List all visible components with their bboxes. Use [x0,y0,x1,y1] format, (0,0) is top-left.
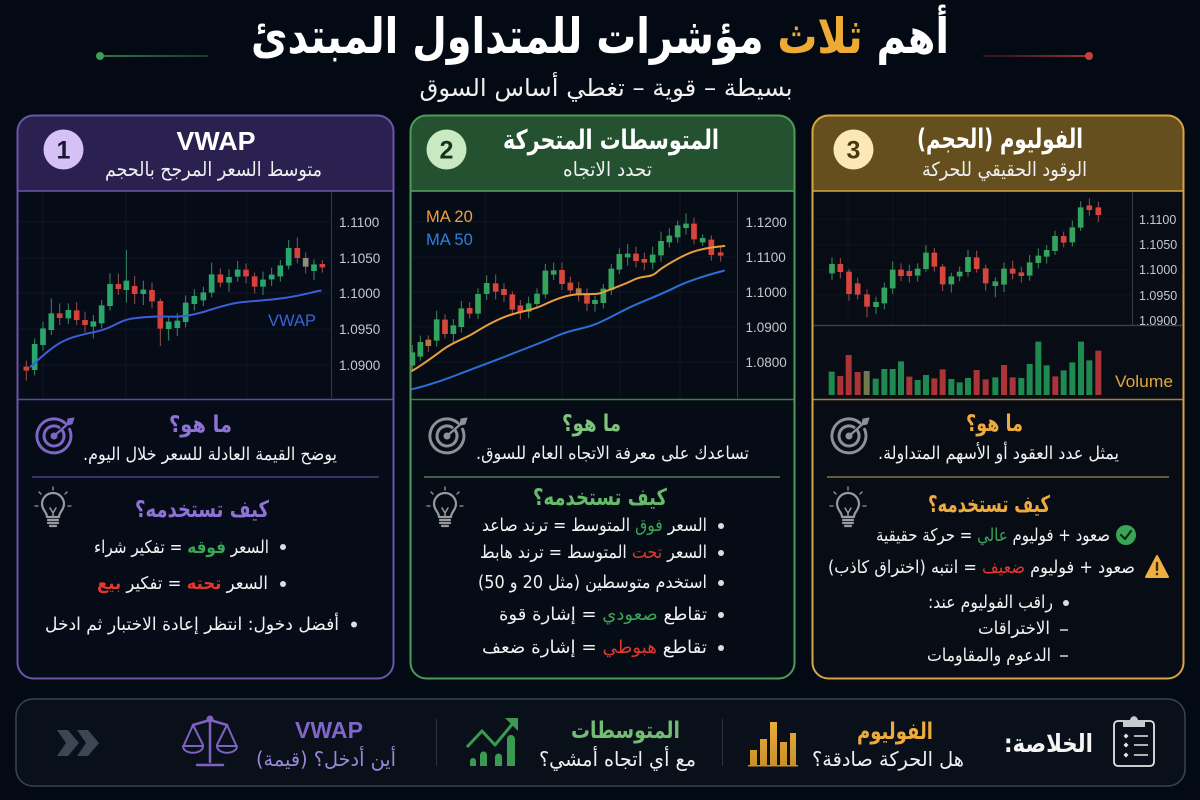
icon: lightbulb [427,487,463,526]
summary: VWAP [256,717,396,771]
price axis: 1.1200 [746,215,787,230]
summary: volume: هل الحركة صادقة؟ [812,747,964,771]
how to use heading: كيف تستخدمه؟ [533,485,667,511]
icon: target [430,418,467,453]
summary: VWAP: أين أدخل؟ (قيمة) [256,746,396,771]
chart: VWAP candles [18,192,380,398]
panel: moving averages [410,116,794,678]
what is it heading: ما هو؟ [562,411,621,437]
usage list [828,525,1168,666]
summary: moving averages: المتوسطات [571,718,680,744]
what is it text: يوضح القيمة العادلة للسعر خلال اليوم. [83,445,337,465]
title: أهم ثلاث مؤشرات للمتداول المبتدئ [251,4,949,66]
price axis: 1.1000 [339,286,380,301]
summary: VWAP: VWAP [295,717,363,743]
how to use heading: كيف تستخدمه؟ [135,497,269,523]
summary: volume: الفوليوم [857,719,933,745]
VWAP line label: VWAP [268,311,316,330]
bullet list: استخدم متوسطين (مثل 20 و 50) [478,573,707,593]
icon: clipboard [1114,716,1154,766]
heading VWAP: VWAP [176,126,256,156]
subheading: متوسط السعر المرجح بالحجم [105,158,322,181]
badge 1 [44,130,84,170]
price axis: 1.1050 [339,251,380,266]
bullet list: تقاطع صعودي = إشارة قوة [499,605,707,625]
how to use heading: كيف تستخدمه؟ [928,492,1050,518]
bullet list: تقاطع هبوطي = إشارة ضعف [482,638,707,658]
price axis: 1.0950 [339,322,380,337]
bullet list: السعر فوقه = تفكير شراء [94,538,269,558]
icon: volume bars [748,722,798,766]
icon: check [1116,525,1136,545]
legend: MA 20 [426,208,473,226]
heading: المتوسطات المتحركة [503,125,719,156]
panel 1 header [18,116,394,191]
bullet list [45,538,357,635]
chart: volume candles and bars [813,192,1182,395]
badge 1: 1 [57,136,71,164]
usage list: الدعوم والمقاومات [927,646,1051,666]
heading: الفوليوم (الحجم) [917,124,1083,155]
usage list: صعود + فوليوم ضعيف = انتبه (اختراق كاذب) [828,558,1135,578]
summary label: الخلاصة: [1004,729,1093,758]
panel: volume [812,116,1184,678]
bullet list: السعر تحته = تفكير بيع [97,574,268,594]
price axis: 1.1100 [339,215,379,230]
usage list: صعود + فوليوم عالي = حركة حقيقية [876,526,1110,546]
panel 2 header [410,116,794,191]
badge 2 [426,130,466,170]
price axis: 1.0800 [746,355,787,370]
title accent: green line [96,52,208,60]
summary: moving averages: مع أي اتجاه أمشي؟ [539,746,696,772]
price axis: 1.0950 [1139,289,1177,303]
summary: moving averages [539,718,696,772]
icon: chevrons [57,730,99,756]
price axis: 1.1000 [746,285,787,300]
legend [426,208,473,249]
what is it heading: ما هو؟ [169,412,232,438]
badge 3: 3 [847,136,860,164]
price axis: 1.0900 [1139,314,1177,328]
price axis: 1.0900 [339,358,380,373]
price axis: 1.0900 [746,320,787,335]
badge 3 [834,130,874,170]
summary: volume [812,719,964,771]
icon: lightbulb [35,487,71,526]
icon: target [37,418,74,453]
price axis [746,215,787,370]
usage list: الاختراقات [978,619,1050,639]
price axis: 1.1100 [746,250,786,265]
price axis: 1.1050 [1139,238,1177,252]
price axis [1139,213,1177,328]
bullet list: السعر تحت المتوسط = ترند هابط [480,543,707,563]
subheading: الوقود الحقيقي للحركة [922,158,1087,181]
bullet list [478,516,724,658]
price axis [339,215,380,373]
chart: moving averages [411,192,787,398]
badge 2: 2 [440,136,453,164]
bullet list: أفضل دخول: انتظر إعادة الاختبار ثم ادخل [45,612,339,635]
panel: VWAP [18,116,394,678]
subheading: تحدد الاتجاه [563,158,652,181]
icon: trend chart [467,718,518,766]
title accent: red line [983,52,1093,60]
subtitle: بسيطة – قوية – تغطي أساس السوق [420,72,792,102]
what is it text: تساعدك على معرفة الاتجاه العام للسوق. [476,444,749,464]
summary bar [16,699,1185,786]
icon: warning [1146,556,1168,577]
icon: scales [183,716,237,765]
panel 3 header [812,116,1184,191]
legend: MA 50 [426,231,473,249]
price axis: 1.1000 [1139,263,1177,277]
what is it heading: ما هو؟ [966,411,1023,437]
usage list: راقب الفوليوم عند: [928,593,1053,613]
price axis: 1.1100 [1139,213,1176,227]
icon: lightbulb [830,487,866,526]
icon: target [832,418,869,453]
what is it text: يمثل عدد العقود أو الأسهم المتداولة. [878,441,1119,464]
bullet list: السعر فوق المتوسط = ترند صاعد [482,516,707,536]
Volume label: Volume [1115,372,1173,391]
